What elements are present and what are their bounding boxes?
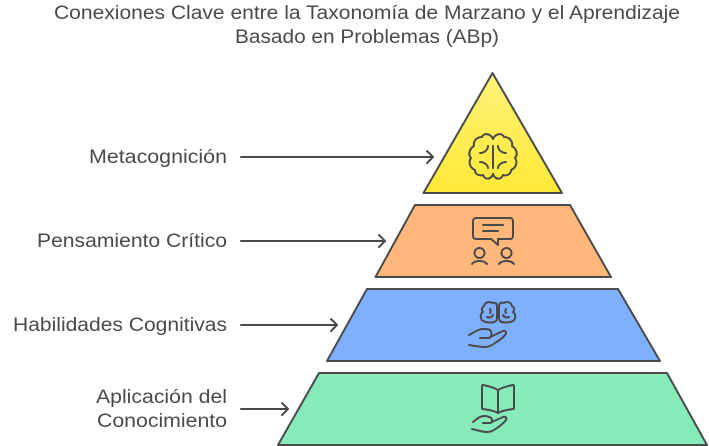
title: Basado en Problemas (ABp): [235, 27, 499, 48]
label: Habilidades Cognitivas: Habilidades Cognitivas: [13, 315, 227, 336]
arrow: Habilidades Cognitivas: [241, 319, 337, 331]
panel: Habilidades Cognitivas trapezoid: [327, 289, 660, 361]
title: Conexiones Clave entre la Taxonomía de Marzano y el Aprendizaje: [54, 3, 680, 24]
label: Aplicación del Conocimiento: Aplicación del: [96, 387, 227, 408]
label: Metacognición: Metacognición: [89, 147, 227, 168]
icon: hand holding book: [472, 385, 514, 432]
label: Aplicación del Conocimiento: [96, 387, 227, 432]
arrow: Aplicación del Conocimiento: [241, 403, 288, 415]
panel: Pensamiento Crítico trapezoid: [376, 205, 611, 277]
panel: Aplicación del Conocimiento trapezoid: [278, 373, 707, 445]
arrow: Metacognición: [241, 151, 433, 163]
title: [54, 3, 680, 48]
panel: Metacognición triangle: [424, 73, 562, 193]
icon: speech bubble with two people: [472, 218, 514, 264]
icon: brain: [469, 134, 517, 179]
label: Aplicación del Conocimiento: Conocimiento: [97, 411, 227, 432]
arrow: Pensamiento Crítico: [241, 235, 385, 247]
icon: hand holding brain: [469, 302, 515, 347]
label: Pensamiento Crítico: Pensamiento Crítico: [37, 231, 227, 252]
